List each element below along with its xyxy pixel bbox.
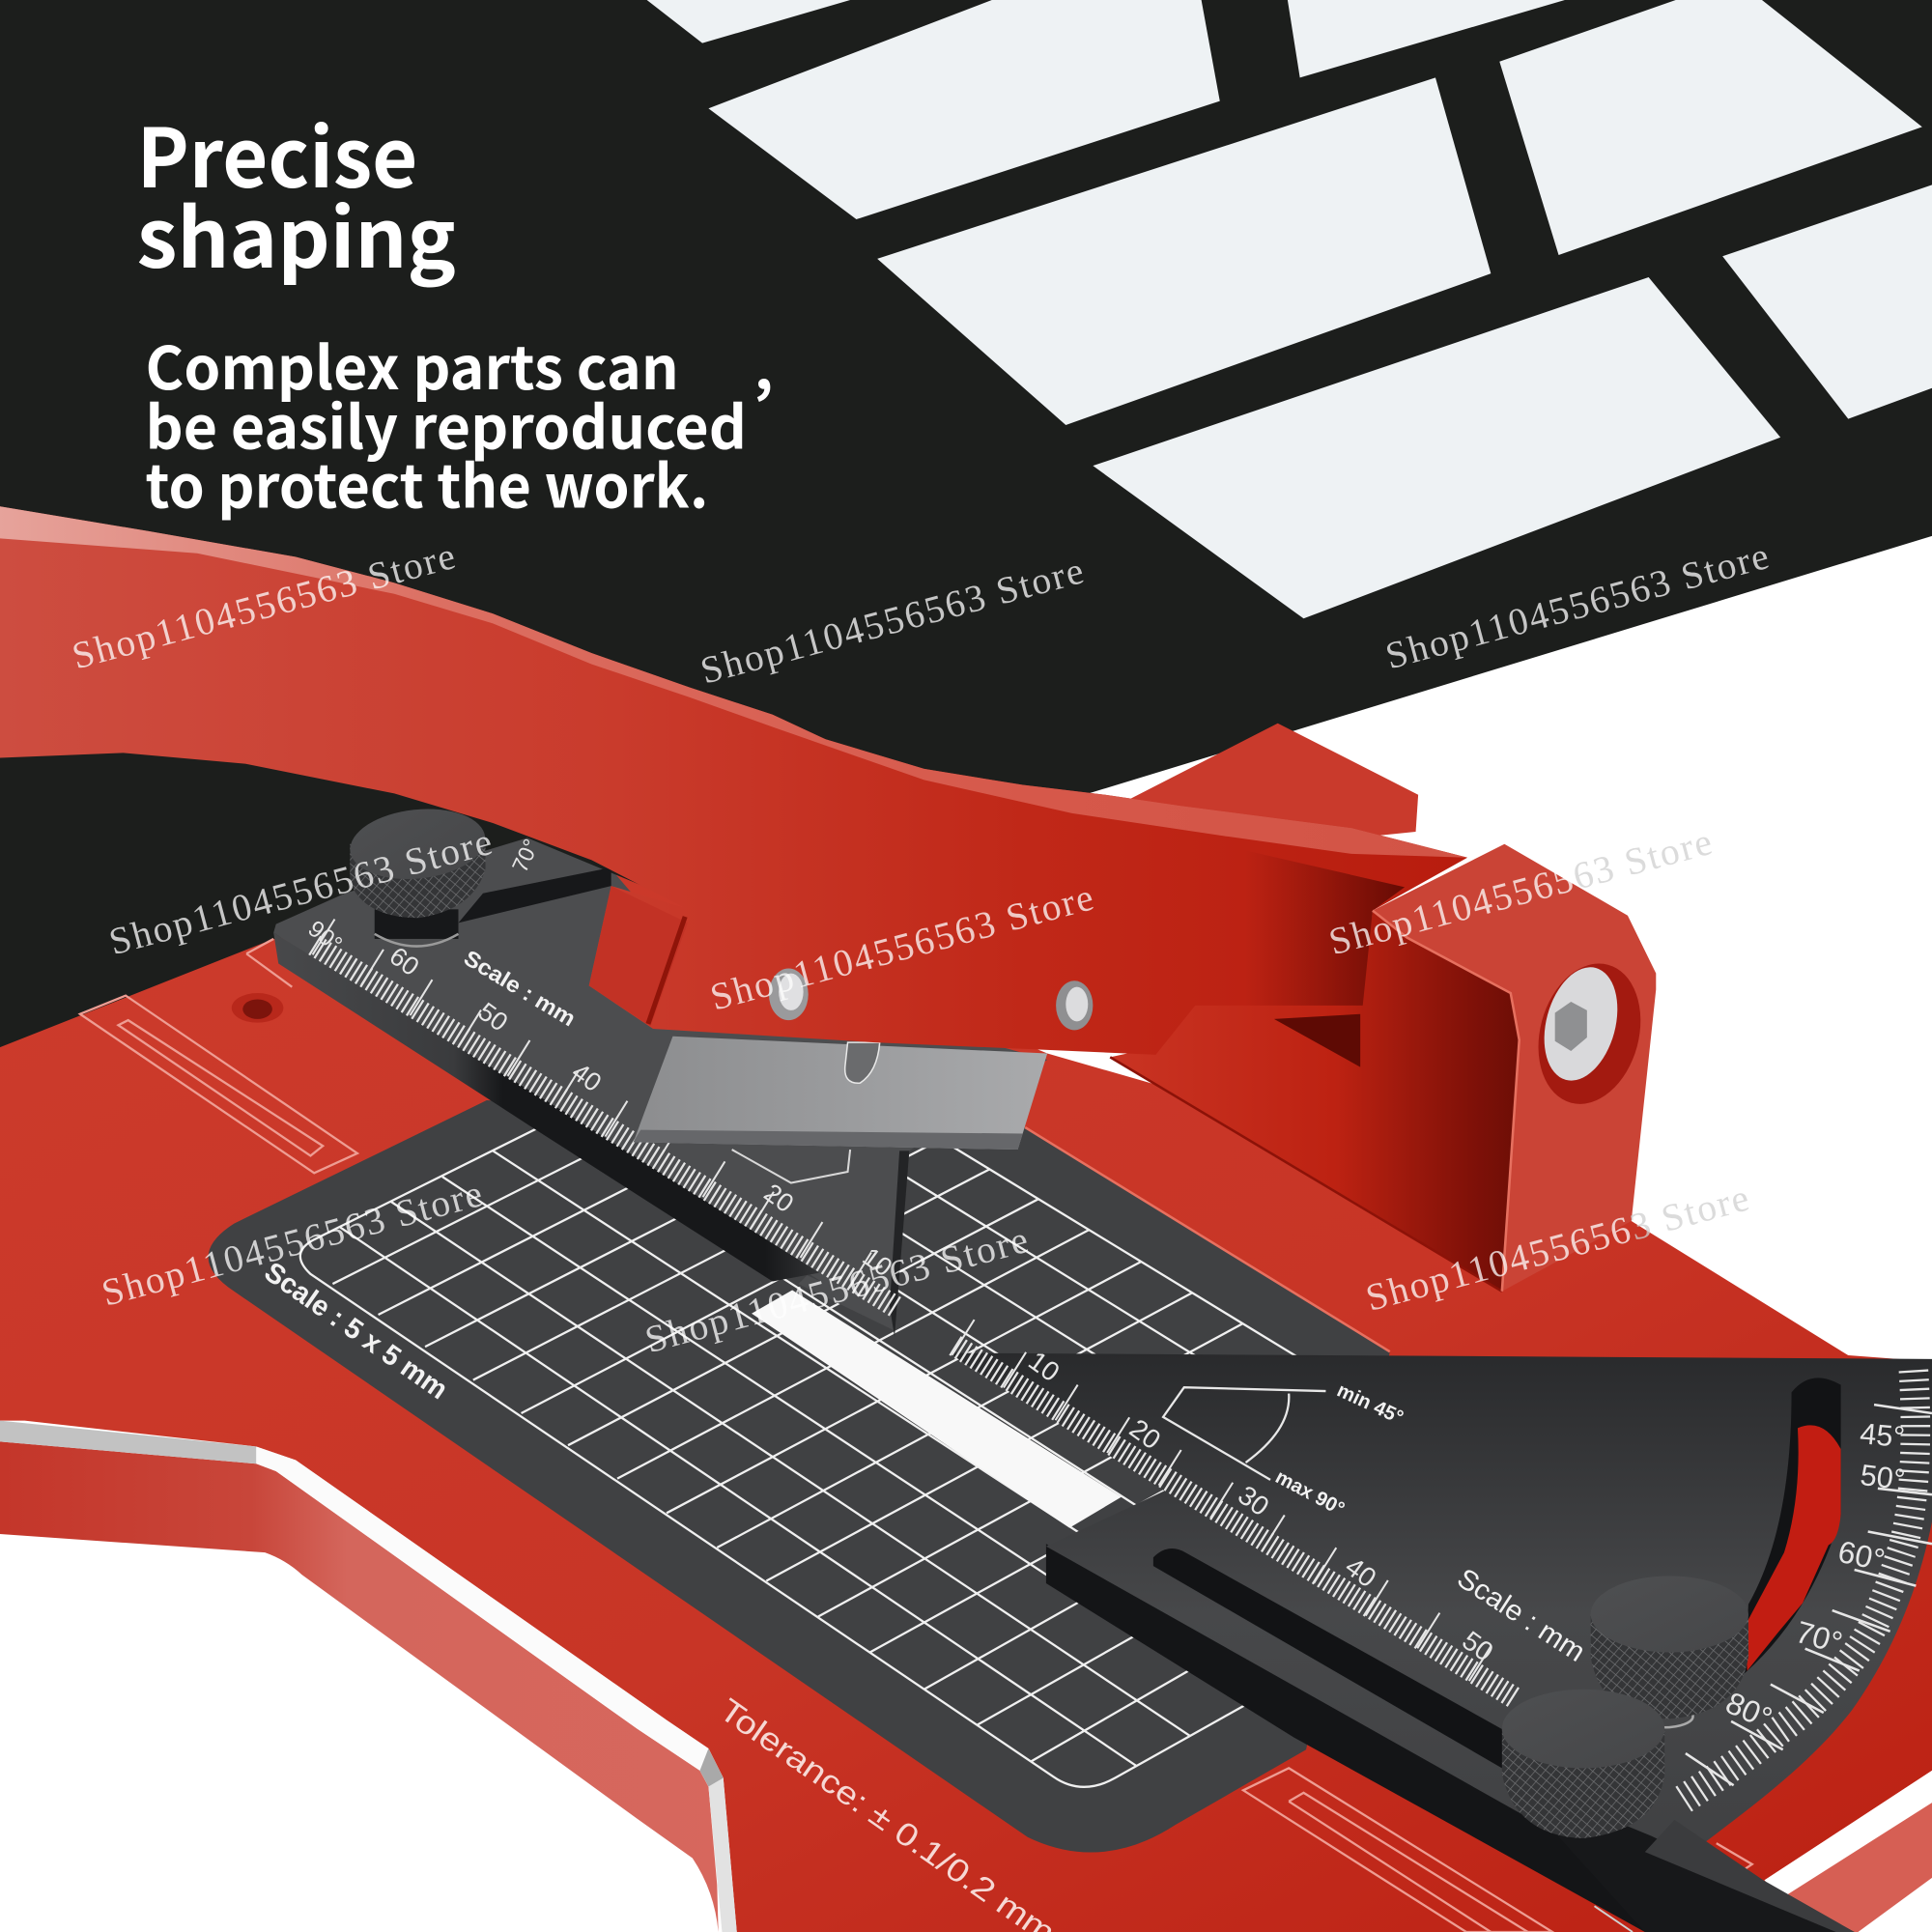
arc long ticks: [1686, 1405, 1932, 1785]
panel: black cutting mat: [0, 0, 1932, 1109]
front slide bar shadow: [1046, 1544, 1731, 1932]
white cut strip: [752, 1290, 1122, 1528]
arm jaw: [589, 886, 688, 1026]
title: Precise: [137, 94, 417, 212]
lower front knob: [1502, 1690, 1664, 1838]
front gauge labels: 50: [1457, 1625, 1499, 1667]
upper front knob: [1591, 1576, 1748, 1727]
red lever arm: [0, 506, 1467, 1055]
body text: be easily reproduced: [146, 380, 747, 466]
front gauge labels: 50°: [1859, 1459, 1907, 1496]
base front bevel: [0, 1441, 719, 1932]
front gauge labels: 40: [1340, 1551, 1381, 1593]
store watermarks: [68, 534, 1773, 1361]
rear red block: [1131, 724, 1418, 838]
back gauge knob: [347, 803, 489, 947]
front gauge labels: [1023, 1346, 1907, 1736]
white cut paper tiles on the mat: [647, 0, 1932, 618]
hinge block with hex bolt: [1373, 844, 1656, 1292]
store watermarks: Shop1104556563 Store: [1381, 534, 1773, 677]
min angle label: min 45°: [1334, 1379, 1406, 1429]
etched slots on base: [80, 939, 1752, 1932]
title: [137, 94, 456, 292]
store watermarks: Shop1104556563 Store: [1361, 1177, 1753, 1320]
hinge fence wall: [1110, 911, 1520, 1292]
back gauge labels: 90°: [303, 916, 347, 958]
front gauge labels: 60°: [1835, 1534, 1888, 1577]
red tool base plate: [0, 875, 1932, 1932]
store watermarks: Shop1104556563 Store: [696, 549, 1088, 693]
bar lower section: [1502, 1775, 1855, 1932]
bright chamfer strip: [0, 1421, 737, 1932]
store watermarks: Shop1104556563 Store: [104, 820, 497, 963]
front protractor: [949, 1337, 1932, 1932]
blade: [634, 1037, 1047, 1150]
front gauge labels: 80°: [1720, 1685, 1777, 1736]
angle symbol: [1163, 1387, 1325, 1480]
back gauge labels: [303, 835, 897, 1282]
body text: ,: [754, 321, 774, 407]
body text: [146, 321, 774, 526]
threaded hole: [232, 993, 283, 1023]
grid lines: [332, 1148, 1242, 1766]
plate text: grid scale: Scale : 5 x 5 mm: [259, 1256, 453, 1406]
base text: tolerance: Tolerance: ± 0.1/0.2 mm: [713, 1692, 1062, 1932]
store watermarks: Shop1104556563 Store: [706, 875, 1097, 1019]
arm top face: [0, 506, 1467, 858]
store watermarks: Shop1104556563 Store: [1324, 820, 1717, 963]
grid outline: [300, 1023, 1570, 1787]
bar slot: [1153, 1548, 1506, 1768]
front gauge labels: 70°: [1792, 1614, 1846, 1661]
store watermarks: Shop1104556563 Store: [68, 534, 460, 677]
angle slot: [1745, 1378, 1841, 1673]
red crescent: [1745, 1425, 1841, 1671]
back gauge labels: 40: [566, 1057, 607, 1097]
back gauge scale caption: Scale : mm: [460, 945, 581, 1031]
back gauge labels: 20: [758, 1178, 799, 1218]
front gauge labels: 10: [1023, 1346, 1065, 1387]
front gauge scale caption: Scale : mm: [1452, 1562, 1591, 1668]
title: shaping: [137, 174, 456, 292]
back gauge labels: 10: [857, 1242, 897, 1282]
front gauge labels: 20: [1124, 1413, 1166, 1455]
store watermarks: Shop1104556563 Store: [98, 1172, 487, 1315]
lower right chamfer: [1765, 1771, 1932, 1895]
front gauge labels: 30: [1233, 1480, 1274, 1521]
body text: Complex parts can: [146, 321, 679, 407]
body text: to protect the work.: [146, 440, 708, 526]
back gauge labels: 50: [473, 997, 513, 1037]
front gauge labels: 45°: [1859, 1417, 1906, 1454]
arc ticks: [1678, 1370, 1916, 1803]
back gauge labels: 60: [384, 941, 424, 981]
rivets: [769, 969, 1093, 1030]
cutting plate with 5 x 5 mm grid: [209, 1100, 1390, 1853]
back gauge labels: 70°: [507, 835, 544, 876]
back angle gauge: [273, 835, 1047, 1337]
front ruler ticks: [955, 1346, 1515, 1698]
arm end shadow: [1244, 850, 1405, 1006]
max angle label: max 90°: [1272, 1466, 1348, 1520]
bright plate edge: [1025, 1127, 1390, 1351]
store watermarks: Shop1104556563 Store: [640, 1218, 1033, 1361]
